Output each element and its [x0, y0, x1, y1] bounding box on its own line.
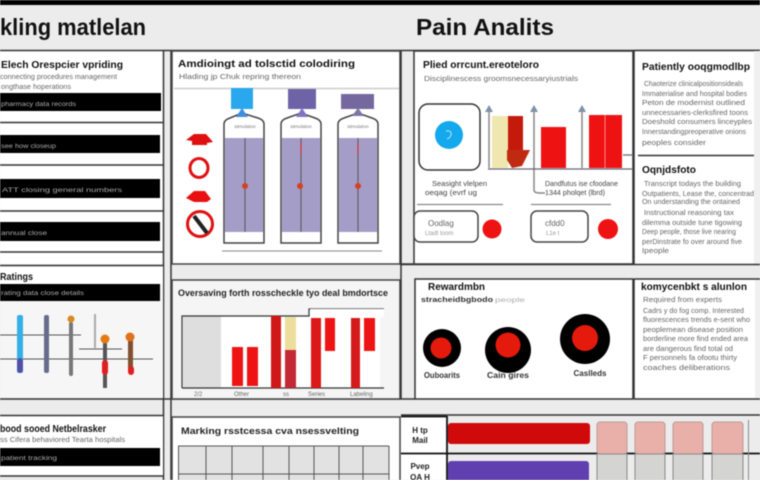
stat card 1: Ltadt toom	[425, 231, 453, 237]
arrows	[485, 105, 586, 193]
black row 2	[0, 135, 160, 153]
caption 2: 1344 pholqet (lbrd)	[545, 188, 605, 197]
circle 3	[560, 314, 610, 378]
circles subheading: people	[495, 297, 526, 304]
circle 1: Ouboarits	[424, 371, 461, 380]
panel: marking grid	[172, 417, 400, 480]
panel: bar chart	[172, 280, 400, 399]
text block 1	[642, 81, 753, 147]
chart labels: Series	[308, 392, 325, 398]
column 1: stimulation	[234, 124, 256, 129]
text block 1: Doeshold consumers linceyples	[642, 119, 753, 126]
component text block: borderline more find ended area	[643, 336, 748, 343]
black row 3	[0, 179, 160, 198]
icon: blue tag	[231, 88, 253, 117]
icon: red tag	[186, 191, 211, 202]
component text block	[643, 308, 750, 372]
chart labels	[194, 392, 373, 398]
list description: connecting procedures management	[0, 74, 117, 81]
text block 2: On understanding the ontained	[642, 199, 740, 206]
bar chart heading: Oversaving forth rosscheckle tyo deal bmdortsce	[178, 288, 388, 299]
stat card 1	[414, 211, 502, 242]
circles subheading: stracheidbgbodo	[421, 295, 493, 304]
text block 2	[642, 181, 754, 255]
lower list description: ss Cifera behaviored Tearta hospitals	[0, 437, 126, 444]
pin: red with orange head	[100, 334, 110, 388]
component text block: Cadrs y do fog comp. Interested	[643, 308, 744, 315]
circles heading: Rewardmbn	[428, 281, 485, 293]
circle 2	[485, 327, 531, 380]
list description: ongthase hoperations	[1, 84, 72, 91]
text block 2: Instructional reasoning tax	[644, 210, 735, 217]
text block 1: Peton de modernist outlined	[642, 100, 745, 107]
circle 3: Caslleds	[574, 368, 607, 378]
row label 1	[412, 426, 428, 445]
pin chart black bar: rating data close details	[1, 290, 85, 297]
row label 2	[410, 462, 430, 480]
caption 1: Seasight vlelpen	[432, 179, 487, 188]
pin: blue	[17, 315, 23, 373]
component text block: are dangerous find total od	[643, 346, 733, 353]
chart labels: Other	[234, 392, 249, 398]
text block 1: unnecessaries-clerksfired toons	[642, 110, 749, 117]
lower list black bar: patient tracking	[1, 455, 57, 462]
lower list black bar	[0, 448, 160, 466]
text heading 2: Oqnjdsfoto	[642, 164, 696, 176]
icon: red shirt	[186, 134, 213, 145]
pain chart subheading: Disciplinescess groomsnecessaryiustrials	[424, 76, 579, 83]
text block 1: Immaterialise and hospital bodies	[642, 91, 748, 98]
gray cells	[597, 454, 743, 480]
pin: thin gray	[94, 314, 96, 348]
component text block: peoplemean disease position	[643, 327, 743, 334]
caption 2: Dandfutus ise cfoodane	[545, 179, 618, 188]
grid heading: Marking rsstcessa cva nsessvelting	[181, 426, 359, 437]
text block 2: Outpatients, Lease the, concentrad	[642, 191, 754, 198]
pin: slate	[44, 315, 49, 373]
component subheading: Required from experts	[643, 297, 723, 304]
text block 2: Ipeople	[642, 248, 669, 255]
column 2: stimulation	[290, 124, 312, 129]
chart labels: 2/2	[194, 392, 203, 398]
icon: prohibition sign	[188, 212, 212, 236]
panel: column comparison	[172, 51, 400, 264]
row label 2: Pvep	[410, 462, 430, 471]
pin: brown with orange head	[126, 332, 134, 375]
pain chart heading: Plied orrcunt.ereoteloro	[423, 59, 539, 71]
icon: purple tag	[288, 89, 316, 117]
circle 1	[423, 329, 461, 380]
title left: kling matlelan	[0, 14, 146, 40]
red bar	[448, 423, 590, 444]
lower list heading: bood sooed Netbelrasker	[0, 423, 106, 435]
panel: pain chart	[401, 51, 633, 264]
top black bar	[0, 0, 760, 5]
column 1	[224, 113, 264, 243]
chart labels: ss	[283, 392, 289, 398]
pin chart heading: Ratings	[0, 271, 33, 283]
component text block: F personnels fa ofootu thirty	[643, 355, 738, 362]
bars	[232, 316, 375, 388]
row label 1: Mail	[412, 436, 428, 445]
panel: component text	[634, 279, 760, 399]
column 3: stimulation	[347, 124, 369, 129]
text block 2: Transcript todays the building	[644, 181, 741, 188]
text block 2: perDinstrate fo over around five	[642, 239, 742, 246]
purple bar	[448, 461, 589, 480]
icon: red ring	[190, 158, 208, 178]
chart labels: Labeling	[350, 392, 373, 398]
black row 4	[0, 222, 160, 241]
caption 1: oeqag (evrf ug	[425, 188, 477, 197]
text block 1: Chaoterize clinicalpositionsideals	[644, 81, 743, 88]
panel: bottom right table	[401, 415, 760, 480]
title right: Pain Analits	[416, 14, 554, 40]
text block 1: peoples consider	[642, 140, 707, 147]
black row 1	[0, 93, 161, 111]
stat card 1: Oodlag	[428, 219, 454, 228]
text block 2: Deep people, those live nearing	[642, 229, 736, 236]
pin chart black bar	[0, 284, 160, 301]
panel: lower left list	[0, 416, 163, 476]
text block 2: dilemma outside tune tigowing	[642, 220, 742, 227]
pink cells	[597, 422, 743, 454]
column 3	[338, 113, 378, 243]
grid table	[178, 446, 389, 480]
icon: violet tag	[341, 94, 374, 116]
black row 2: see how closeup	[1, 143, 56, 150]
column 2	[281, 113, 321, 243]
panel: pain text	[634, 50, 760, 264]
component text block: coaches deliberations	[643, 365, 731, 372]
list description	[0, 74, 117, 91]
icon: device with blue circle	[419, 104, 480, 170]
black row 1: pharmacy data records	[1, 101, 77, 108]
panel: circles	[401, 264, 633, 399]
list heading: Elech Orespcier vpriding	[1, 59, 123, 71]
panel: pin chart	[0, 266, 400, 399]
stat card 2: L1e t	[546, 231, 560, 237]
caption 2	[545, 179, 618, 197]
row label 1: H tp	[412, 426, 428, 435]
stat card 2	[531, 211, 618, 242]
text block 1: Innerstandingpreoperative onions	[642, 129, 747, 136]
circle 2: Cain gires	[487, 370, 529, 380]
comparison subheading: Hlading jp Chuk repring thereon	[179, 74, 301, 81]
component text block: fluorescences trends e-sent who	[643, 317, 750, 324]
text heading: Patiently ooqgmodlbp	[642, 61, 750, 73]
stat card 2: cfdd0	[545, 219, 565, 228]
bars	[492, 115, 622, 168]
black row 3: ATT closing general numbers	[2, 187, 123, 194]
black row 4: annual close	[1, 230, 47, 237]
comparison heading: Amdioingt ad tolsctid colodiring	[178, 58, 355, 70]
caption 1	[425, 179, 487, 197]
circles subheading	[421, 295, 526, 304]
component heading: komycenbkt s alunlon	[641, 281, 747, 293]
pin: gray with orange head	[68, 316, 74, 376]
